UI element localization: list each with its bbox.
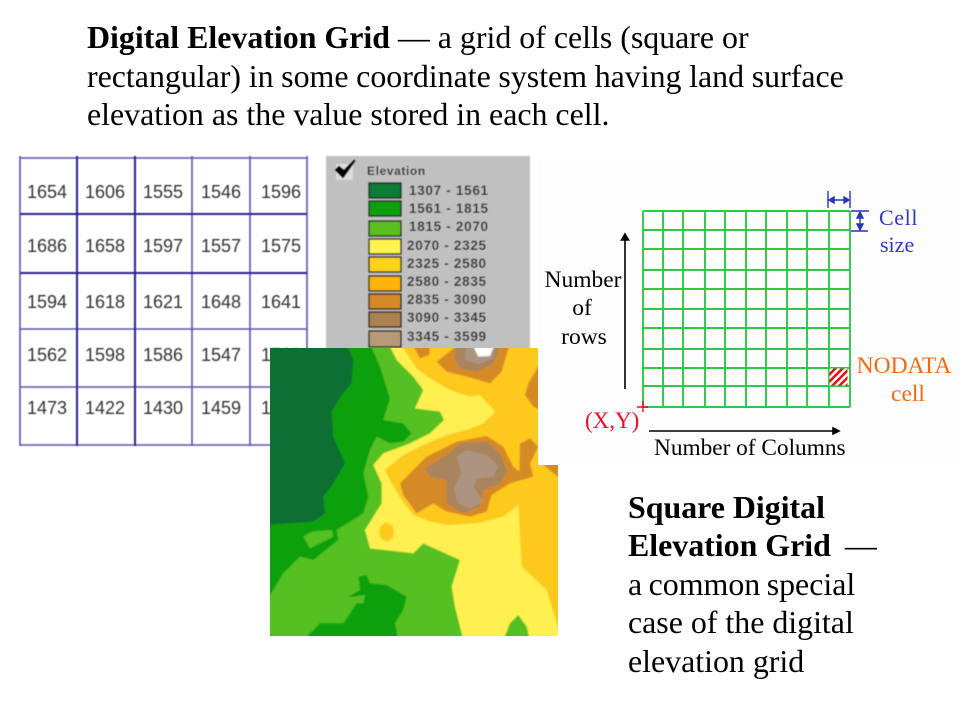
map: yellow band (363, 343, 560, 640)
map: brown peak (425, 442, 507, 513)
title: digital elevation grid definition (87, 20, 844, 132)
text block: square digital elevation grid: Elevation Grid — (628, 528, 878, 563)
legend labels: 3345 - 3599 (407, 329, 487, 344)
map: light green (263, 340, 463, 640)
text block: square digital elevation grid: case of the digital (628, 605, 854, 640)
green cell grid (643, 211, 850, 407)
table values: 1547 (201, 345, 241, 365)
table values: 1562 (261, 345, 301, 365)
table values: 1598 (85, 345, 125, 365)
table values: 1473 (261, 398, 301, 418)
text block: square digital elevation grid: a common special (628, 567, 855, 602)
table values: 1597 (143, 236, 183, 256)
legend labels: 2070 - 2325 (407, 238, 487, 253)
map: right-side orange (525, 363, 560, 478)
legend swatches (369, 183, 401, 347)
text block: square digital elevation grid: elevation grid (628, 644, 804, 679)
table values: 1586 (143, 345, 183, 365)
map: orange ridge (436, 348, 510, 384)
table values: 1596 (261, 182, 301, 202)
rows arrow (622, 234, 628, 389)
table values: 1654 (27, 182, 67, 202)
legend labels (407, 183, 489, 344)
legend heading: Elevation (367, 164, 426, 178)
table values: 1658 (85, 236, 125, 256)
legend labels: 2325 - 2580 (407, 256, 487, 271)
panel: elevation legend (326, 156, 530, 350)
title: digital elevation grid definition: rectangular) in some coordinate system having land surface (87, 59, 844, 94)
table values: 1459 (201, 398, 241, 418)
table values: 1621 (143, 292, 183, 312)
columns arrow (649, 428, 839, 434)
table values: 1557 (201, 236, 241, 256)
legend labels: 1561 - 1815 (409, 201, 489, 216)
table values: 1555 (143, 182, 183, 202)
nodata label: NODATA (857, 353, 951, 379)
number of rows label: Number (544, 267, 622, 293)
panel: elevation map (263, 340, 567, 643)
number of rows label: of (572, 295, 592, 321)
map: grey summit (453, 450, 498, 508)
legend labels: 3090 - 3345 (407, 310, 487, 325)
cell size markers (828, 191, 869, 231)
text block: square digital elevation grid: Square Digital (628, 490, 825, 525)
origin marker (637, 401, 648, 412)
nodata label: cell (891, 381, 925, 407)
cell size label: size (880, 232, 914, 257)
title: digital elevation grid definition: elevation as the value stored in each cell. (87, 97, 609, 132)
table values: 1430 (143, 398, 183, 418)
map: orange spot (379, 523, 394, 541)
table values (27, 182, 301, 418)
origin label: (X,Y) (585, 408, 639, 433)
number of rows label: rows (561, 324, 607, 350)
legend labels: 2580 - 2835 (407, 274, 487, 289)
table values: 1575 (261, 236, 301, 256)
cell size label: Cell (879, 205, 918, 230)
legend labels: 1815 - 2070 (409, 219, 489, 234)
map: dark green (263, 340, 353, 525)
table values: 1606 (85, 182, 125, 202)
number of columns label: Number of Columns (654, 435, 846, 461)
table values: 1546 (201, 182, 241, 202)
table values: 1473 (27, 398, 67, 418)
legend labels: 1307 - 1561 (409, 183, 489, 198)
title: digital elevation grid definition: Digital Elevation Grid — a grid of cells (square or (87, 20, 749, 55)
table values: 1641 (261, 292, 301, 312)
table values: 1562 (27, 345, 67, 365)
table values: 1594 (27, 292, 67, 312)
map: mid green (270, 348, 412, 596)
icon: checkbox tick (336, 160, 355, 180)
panel: grid schematic (538, 160, 960, 465)
nodata cell (830, 368, 848, 386)
panel: elevation value table (20, 156, 307, 446)
table values: 1618 (85, 292, 125, 312)
legend labels: 2835 - 3090 (407, 292, 487, 307)
table values: 1648 (201, 292, 241, 312)
text block: square digital elevation grid (628, 490, 878, 679)
table values: 1422 (85, 398, 125, 418)
table values: 1686 (27, 236, 67, 256)
